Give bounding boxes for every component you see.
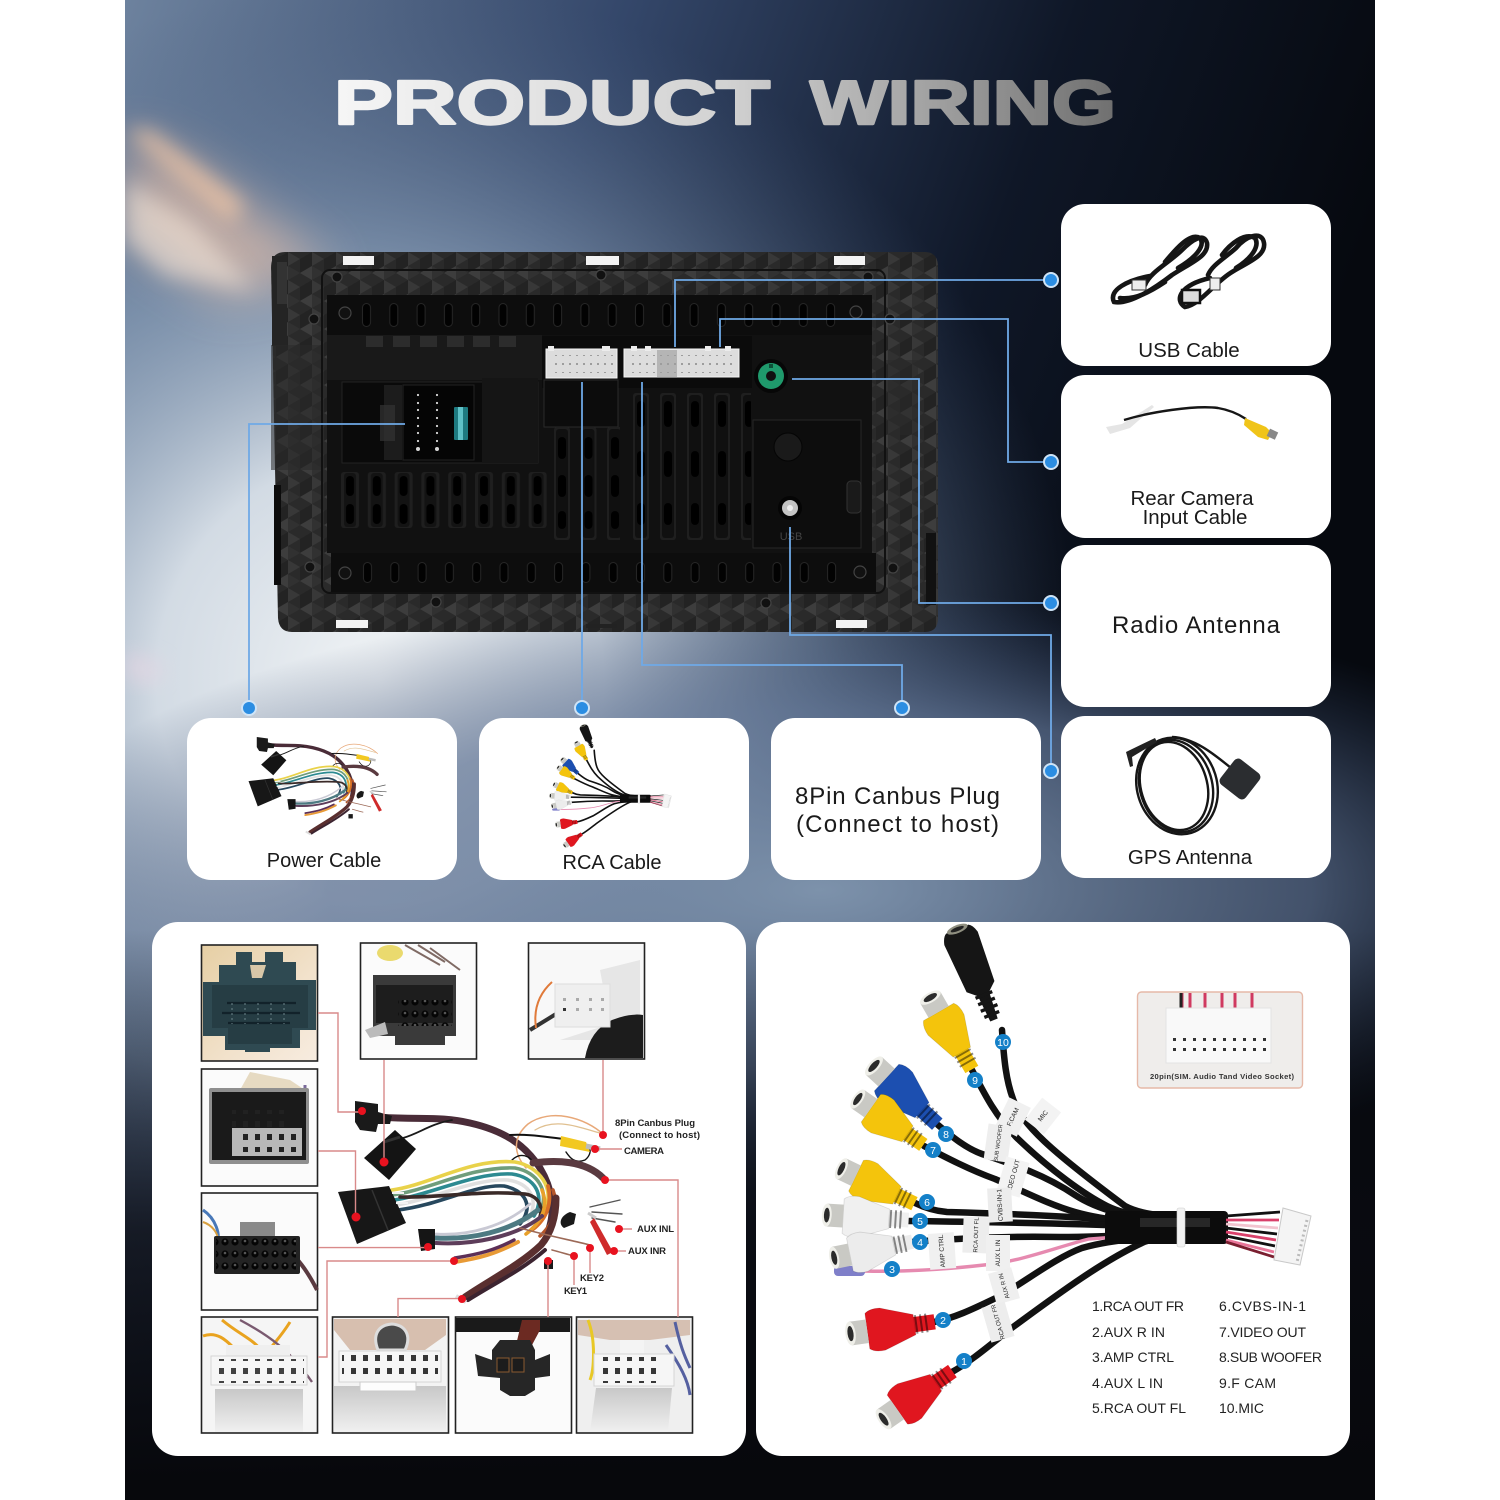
label: GPS Antenna — [1128, 846, 1253, 869]
green microphone port — [754, 359, 788, 393]
harness labels: 8Pin Canbus Plug — [615, 1118, 695, 1129]
numbered badges: 1 — [961, 1356, 967, 1368]
icon: RCA cable — [549, 723, 671, 851]
wire tags: MIC — [1037, 1109, 1050, 1123]
bottom vent strip — [331, 553, 876, 592]
card: rear camera input cable — [1061, 375, 1331, 538]
label: Radio Antenna — [1112, 612, 1281, 639]
photo: white connector B — [332, 1317, 448, 1433]
harness labels — [564, 1118, 700, 1297]
inset: 20 pin socket — [1138, 992, 1302, 1088]
numbered badges: 5 — [917, 1216, 923, 1228]
port legend: 5.RCA OUT FL — [1092, 1400, 1186, 1416]
wire tags: AUX R IN — [998, 1272, 1011, 1299]
mounting screws — [305, 270, 898, 608]
white connector left — [546, 346, 617, 378]
photo: teal connector — [202, 945, 318, 1061]
photo: black ISO socket — [202, 1193, 318, 1310]
inset: 20 pin socket: 20pin(SIM. Audio Tand Video Socket) — [1150, 1072, 1294, 1081]
power socket — [380, 385, 474, 460]
wire tags: RCA OUT FL — [973, 1217, 981, 1253]
icon: camera cable — [1106, 405, 1278, 440]
panel: RCA cable breakdown — [756, 919, 1350, 1456]
wire tags: RCA OUT FR — [991, 1303, 1007, 1340]
harness labels: KEY2 — [580, 1273, 604, 1284]
main body — [327, 335, 872, 553]
numbered badges: 3 — [889, 1264, 895, 1276]
icon: power harness — [249, 737, 386, 834]
head unit rear photo — [271, 252, 938, 632]
port legend: 2.AUX R IN — [1092, 1324, 1165, 1340]
port legend: 1.RCA OUT FR — [1092, 1298, 1184, 1314]
card: USB cable — [1061, 204, 1331, 366]
numbered badges: 4 — [917, 1237, 923, 1249]
red leader lines — [318, 1013, 678, 1357]
card: power cable — [187, 718, 457, 880]
antenna port — [778, 496, 802, 543]
numbered badges: 7 — [930, 1145, 936, 1157]
photo: white connector C — [576, 1317, 692, 1433]
numbered badges: 6 — [924, 1197, 930, 1209]
callout lines — [249, 280, 1051, 771]
wire tags: AMP CTRL — [938, 1234, 947, 1268]
label: input cable line: Input Cable — [1143, 506, 1247, 529]
harness labels: AUX INR — [628, 1246, 666, 1257]
wire tags: F.CAM — [1006, 1107, 1021, 1128]
label: RCA Cable — [563, 852, 661, 874]
port legend: 10.MIC — [1219, 1400, 1264, 1416]
card: GPS antenna — [1061, 716, 1331, 878]
red marker dots — [352, 1107, 623, 1303]
photo: white connector A — [202, 1317, 318, 1433]
wire tags: VIDEO OUT — [1005, 1159, 1022, 1195]
label: Power Cable — [267, 850, 381, 872]
harness labels: AUX INL — [637, 1224, 674, 1235]
card: 8pin canbus plug — [771, 718, 1041, 880]
numbered badges — [884, 1034, 1011, 1369]
top vent strip — [327, 295, 872, 335]
wire tags: CVBS-IN-1 — [996, 1188, 1005, 1221]
card: radio antenna — [1061, 545, 1331, 707]
callout dots — [242, 273, 1058, 778]
antenna port: USB — [780, 531, 802, 543]
title: PRODUCT — [334, 69, 770, 138]
port legend: 4.AUX L IN — [1092, 1375, 1163, 1391]
harness labels: CAMERA — [624, 1146, 664, 1157]
card: RCA cable — [479, 718, 749, 880]
numbered badges: 8 — [943, 1129, 949, 1141]
numbered badges: 2 — [940, 1315, 946, 1327]
icon: USB cable coils — [1113, 236, 1264, 307]
numbered badges: 9 — [972, 1075, 978, 1087]
wire tags: AUX L IN — [995, 1239, 1002, 1266]
port legend: 7.VIDEO OUT — [1219, 1324, 1306, 1340]
port legend — [1092, 1298, 1322, 1416]
icon: GPS antenna — [1124, 727, 1262, 845]
label: USB Cable — [1138, 339, 1240, 362]
photo: black harness connector — [360, 943, 476, 1059]
label: Rear Camera — [1130, 487, 1254, 510]
title: WIRING — [810, 69, 1116, 138]
wire tags: SUB WOOFER — [993, 1124, 1005, 1162]
card: 8pin canbus plug: (Connect to host) — [796, 811, 999, 838]
port legend: 6.CVBS-IN-1 — [1219, 1298, 1306, 1314]
label: 8Pin Canbus Plug — [795, 783, 1000, 810]
photo: white 8pin plug — [528, 943, 644, 1059]
port legend: 9.F CAM — [1219, 1375, 1276, 1391]
port legend: 3.AMP CTRL — [1092, 1349, 1174, 1365]
harness labels: (Connect to host) — [619, 1130, 700, 1141]
white connector right — [624, 346, 739, 377]
wire tags — [928, 1097, 1061, 1343]
photo: grey socket — [202, 1069, 318, 1186]
numbered badges: 10 — [997, 1037, 1009, 1049]
port legend: 8.SUB WOOFER — [1219, 1349, 1322, 1365]
wiring harness — [338, 1101, 622, 1302]
title — [334, 69, 1116, 138]
panel: power harness connectors — [152, 922, 746, 1456]
photo: black 2pin plug — [456, 1317, 572, 1433]
harness labels: KEY1 — [564, 1286, 588, 1297]
RCA cable drawing — [821, 919, 1311, 1439]
